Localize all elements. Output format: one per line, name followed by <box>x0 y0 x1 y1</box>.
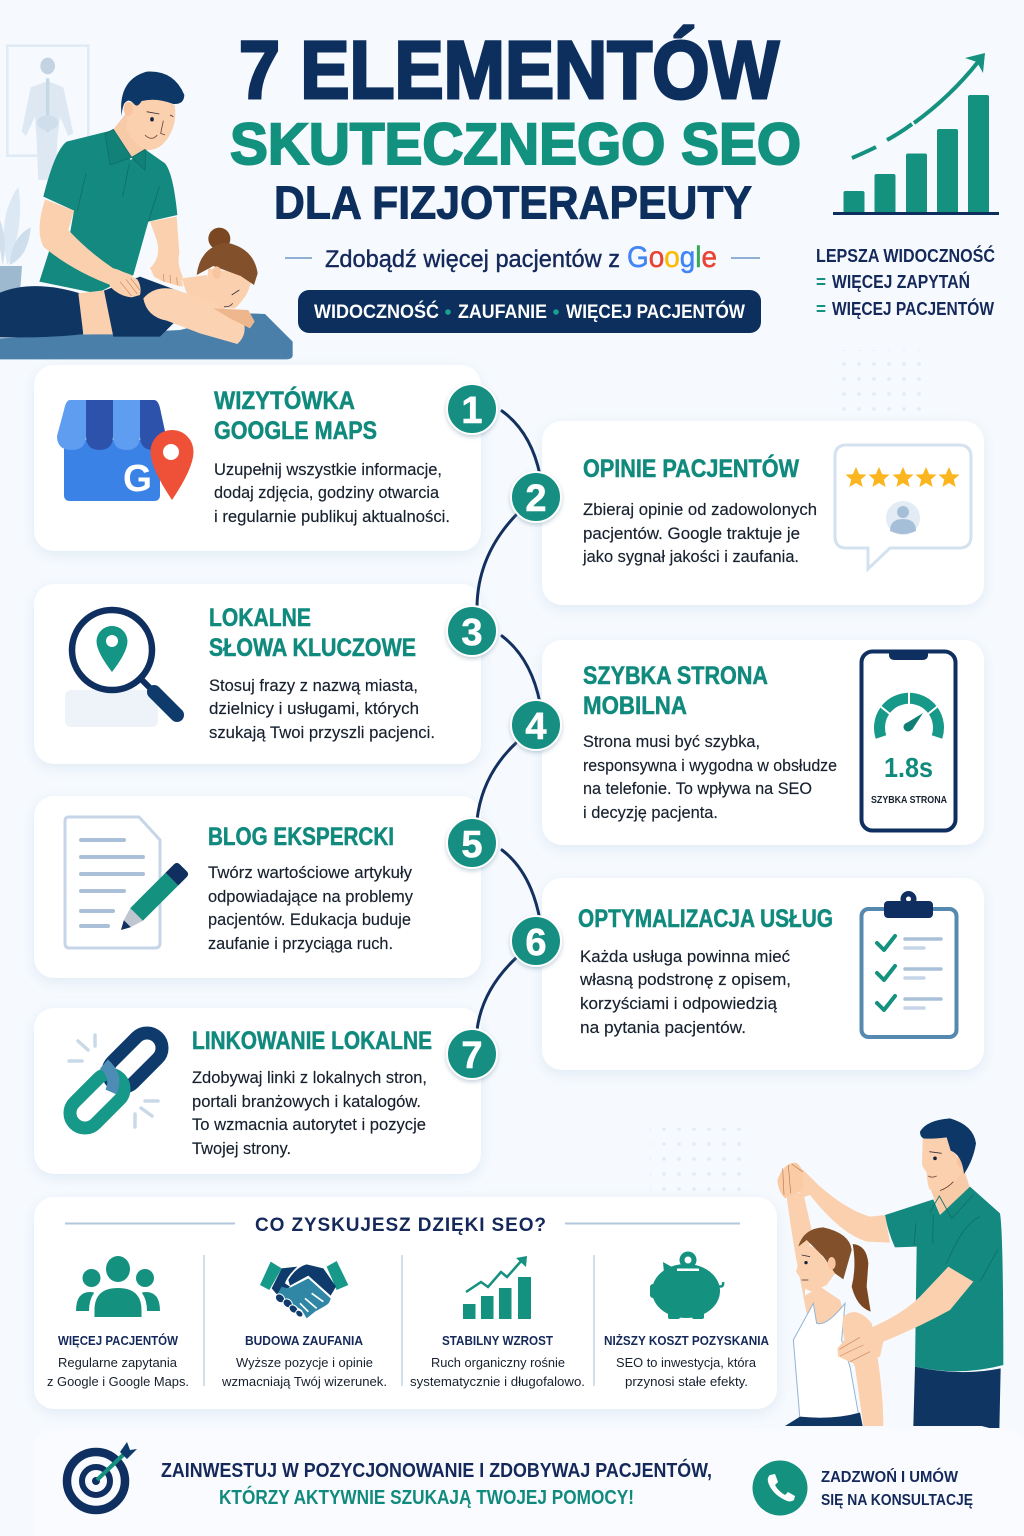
illustration: therapist massaging patient <box>0 46 293 359</box>
connector between numbered steps <box>477 411 540 1030</box>
tagline pill: ZAUFANIE <box>458 302 547 323</box>
step number 1 <box>447 384 497 434</box>
icon: phone call <box>752 1460 808 1516</box>
text block: i regularnie publikuj aktualności. <box>214 507 450 526</box>
poster: anatomy chart <box>7 46 88 180</box>
step number 1: 1 <box>461 390 483 432</box>
heading: LOKALNE <box>209 604 311 632</box>
text block: dodaj zdjęcia, godziny otwarcia <box>214 483 440 502</box>
patient <box>0 228 258 344</box>
text block: Zbieraj opinie od zadowolonych <box>583 500 817 519</box>
benefit: stable growth: systematycznie i długofalowo. <box>410 1374 585 1389</box>
text block: Każda usługa powinna mieć <box>580 947 790 966</box>
benefit: lower acquisition cost: NIŻSZY KOSZT POZYSKANIA <box>604 1333 769 1348</box>
title <box>230 25 801 228</box>
benefit: lower acquisition cost: przynosi stałe efekty. <box>625 1374 748 1389</box>
step number 5: 5 <box>461 824 483 866</box>
text block: portali branżowych i katalogów. <box>192 1092 421 1111</box>
text block <box>209 676 435 742</box>
heading: OPINIE PACJENTÓW <box>583 453 799 483</box>
step number 3: 3 <box>461 612 483 654</box>
text block: Zdobywaj linki z lokalnych stron, <box>192 1068 427 1087</box>
benefit: building trust <box>221 1261 387 1389</box>
heading <box>583 662 768 720</box>
plant <box>0 187 31 293</box>
benefit: stable growth: Ruch organiczny rośnie <box>431 1355 565 1370</box>
benefit: stable growth <box>410 1256 585 1389</box>
heading: LINKOWANIE LOKALNE <box>192 1027 432 1055</box>
call text <box>821 1467 973 1509</box>
side note: better visibility: WIĘCEJ ZAPYTAŃ <box>832 271 970 292</box>
text block <box>192 1068 427 1158</box>
subtitle with Google: Zdobądź więcej pacjentów z <box>325 246 620 273</box>
heading <box>209 604 416 662</box>
call text: ZADZWOŃ I UMÓW <box>821 1467 959 1486</box>
icon: chain link <box>64 1027 168 1134</box>
heading: OPTYMALIZACJA USŁUG <box>578 905 833 933</box>
icon: phone with speedometer: 1.8s <box>884 752 933 783</box>
therapist <box>794 1118 1003 1431</box>
heading: MOBILNA <box>583 692 687 720</box>
patient <box>777 1163 883 1426</box>
text block: Twojej strony. <box>192 1139 291 1158</box>
text block: To wzmacnia autorytet i pozycje <box>192 1115 426 1134</box>
icon: people <box>76 1256 160 1317</box>
step number 7: 7 <box>461 1035 483 1077</box>
illustration: therapist stretching patient's arm <box>777 1118 1003 1431</box>
panel: card 2 patient reviews <box>542 421 984 605</box>
text block: dzielnicy i usługami, których <box>209 699 419 718</box>
heading: WIZYTÓWKA <box>214 385 355 415</box>
therapist lower arm and hand <box>837 1267 973 1363</box>
icon: target with arrow <box>67 1442 137 1510</box>
subtitle with Google <box>285 241 760 274</box>
icon: clipboard checklist <box>862 891 956 1037</box>
heading: GOOGLE MAPS <box>214 417 377 445</box>
icon: piggy bank <box>650 1252 723 1319</box>
text block: Stosuj frazy z nazwą miasta, <box>209 676 418 695</box>
heading: SZYBKA STRONA <box>583 662 768 690</box>
side note: better visibility: = <box>816 299 826 319</box>
text block <box>208 863 413 953</box>
side note: better visibility: LEPSZA WIDOCZNOŚĆ <box>816 245 995 266</box>
step number 3 <box>447 606 497 656</box>
step number 7 <box>447 1029 497 1079</box>
text block: responsywna i wygodna w obsłudze <box>583 756 837 775</box>
text block: odpowiadające na problemy <box>208 887 413 906</box>
step number 6: 6 <box>525 922 547 964</box>
title: 7 ELEMENTÓW <box>239 25 780 116</box>
step number 4 <box>511 700 561 750</box>
text block: pacjentów. Edukacja buduje <box>208 910 411 929</box>
text block: Uzupełnij wszystkie informacje, <box>214 460 442 479</box>
text block <box>583 732 837 822</box>
side note: better visibility <box>816 245 995 319</box>
benefit: more patients: z Google i Google Maps. <box>47 1374 189 1389</box>
tagline pill: WIĘCEJ PACJENTÓW <box>566 301 745 323</box>
heading <box>214 385 377 445</box>
massage table <box>0 313 293 359</box>
benefit: more patients <box>47 1256 189 1389</box>
subtitle with Google: Google <box>627 241 717 274</box>
text block: pacjentów. Google traktuje je <box>583 524 800 543</box>
step number 5 <box>447 818 497 868</box>
icon: review bubble with stars <box>835 445 971 569</box>
icon: handshake <box>260 1261 348 1319</box>
title: DLA FIZJOTERAPEUTY <box>274 176 752 228</box>
text block <box>582 500 817 566</box>
benefit: building trust: Wyższe pozycje i opinie <box>236 1355 373 1370</box>
text block: i decyzję pacjenta. <box>583 803 718 822</box>
icon: phone with speedometer: SZYBKA STRONA <box>871 795 947 806</box>
text block: zaufanie i przyciąga ruch. <box>208 934 393 953</box>
therapist hands <box>106 267 183 297</box>
heading: SŁOWA KLUCZOWE <box>209 634 416 662</box>
step number 2 <box>511 472 561 522</box>
growth bar chart <box>833 53 999 214</box>
step number 4: 4 <box>525 706 547 748</box>
icon: growth chart <box>463 1256 531 1319</box>
panel: card 5 expert blog <box>34 796 481 978</box>
panel: card 6 service optimization <box>542 878 984 1070</box>
tagline pill: WIDOCZNOŚĆ <box>314 301 439 323</box>
panel: card 3 local keywords <box>34 584 481 764</box>
text block: własną podstronę z opisem, <box>579 970 791 989</box>
benefit: more patients: WIĘCEJ PACJENTÓW <box>58 1333 178 1348</box>
icon: Google store with pin: G <box>123 458 152 500</box>
tagline pill <box>298 290 761 333</box>
text block: szukają Twoi przyszli pacjenci. <box>209 723 435 742</box>
text block: korzyściami i odpowiedzią <box>580 994 778 1013</box>
icon: phone with speedometer <box>862 651 956 830</box>
therapist <box>39 72 184 293</box>
text block: na telefonie. To wpływa na SEO <box>583 779 812 798</box>
panel: benefits of SEO <box>34 1197 777 1409</box>
benefit: building trust: BUDOWA ZAUFANIA <box>245 1334 363 1348</box>
text block <box>579 947 791 1037</box>
title: SKUTECZNEGO SEO <box>230 112 801 177</box>
text block: Twórz wartościowe artykuły <box>208 863 412 882</box>
text block <box>214 460 450 526</box>
side note: better visibility: = <box>816 272 826 292</box>
side note: better visibility: WIĘCEJ PACJENTÓW <box>832 298 994 319</box>
panel: call to action <box>34 1428 1024 1536</box>
benefit: lower acquisition cost <box>604 1252 769 1389</box>
headline <box>161 1458 712 1509</box>
panel: card 7 local linking <box>34 1008 481 1174</box>
panel: card 1 Google Maps <box>34 365 481 551</box>
text block: na pytania pacjentów. <box>580 1018 746 1037</box>
text block: jako sygnał jakości i zaufania. <box>582 547 799 566</box>
headline: KTÓRZY AKTYWNIE SZUKAJĄ TWOJEJ POMOCY! <box>219 1485 634 1509</box>
icon: Google store with pin <box>57 400 194 501</box>
icon: document with pencil <box>65 817 190 948</box>
call text: SIĘ NA KONSULTACJĘ <box>821 1492 973 1509</box>
benefit: more patients: Regularne zapytania <box>58 1355 178 1370</box>
text block: Strona musi być szybka, <box>583 732 760 751</box>
benefit: lower acquisition cost: SEO to inwestycja, która <box>616 1355 757 1370</box>
step number 2: 2 <box>525 478 547 520</box>
heading: BLOG EKSPERCKI <box>208 823 394 851</box>
icon: magnifier with pin <box>65 610 177 727</box>
panel: card 4 fast mobile site <box>542 640 984 845</box>
benefit: building trust: wzmacniają Twój wizerunek. <box>221 1374 387 1389</box>
step number 6 <box>511 916 561 966</box>
benefit: stable growth: STABILNY WZROST <box>442 1334 553 1348</box>
headline: ZAINWESTUJ W POZYCJONOWANIE I ZDOBYWAJ PACJENTÓW, <box>161 1458 712 1482</box>
heading: CO ZYSKUJESZ DZIĘKI SEO? <box>255 1215 546 1236</box>
